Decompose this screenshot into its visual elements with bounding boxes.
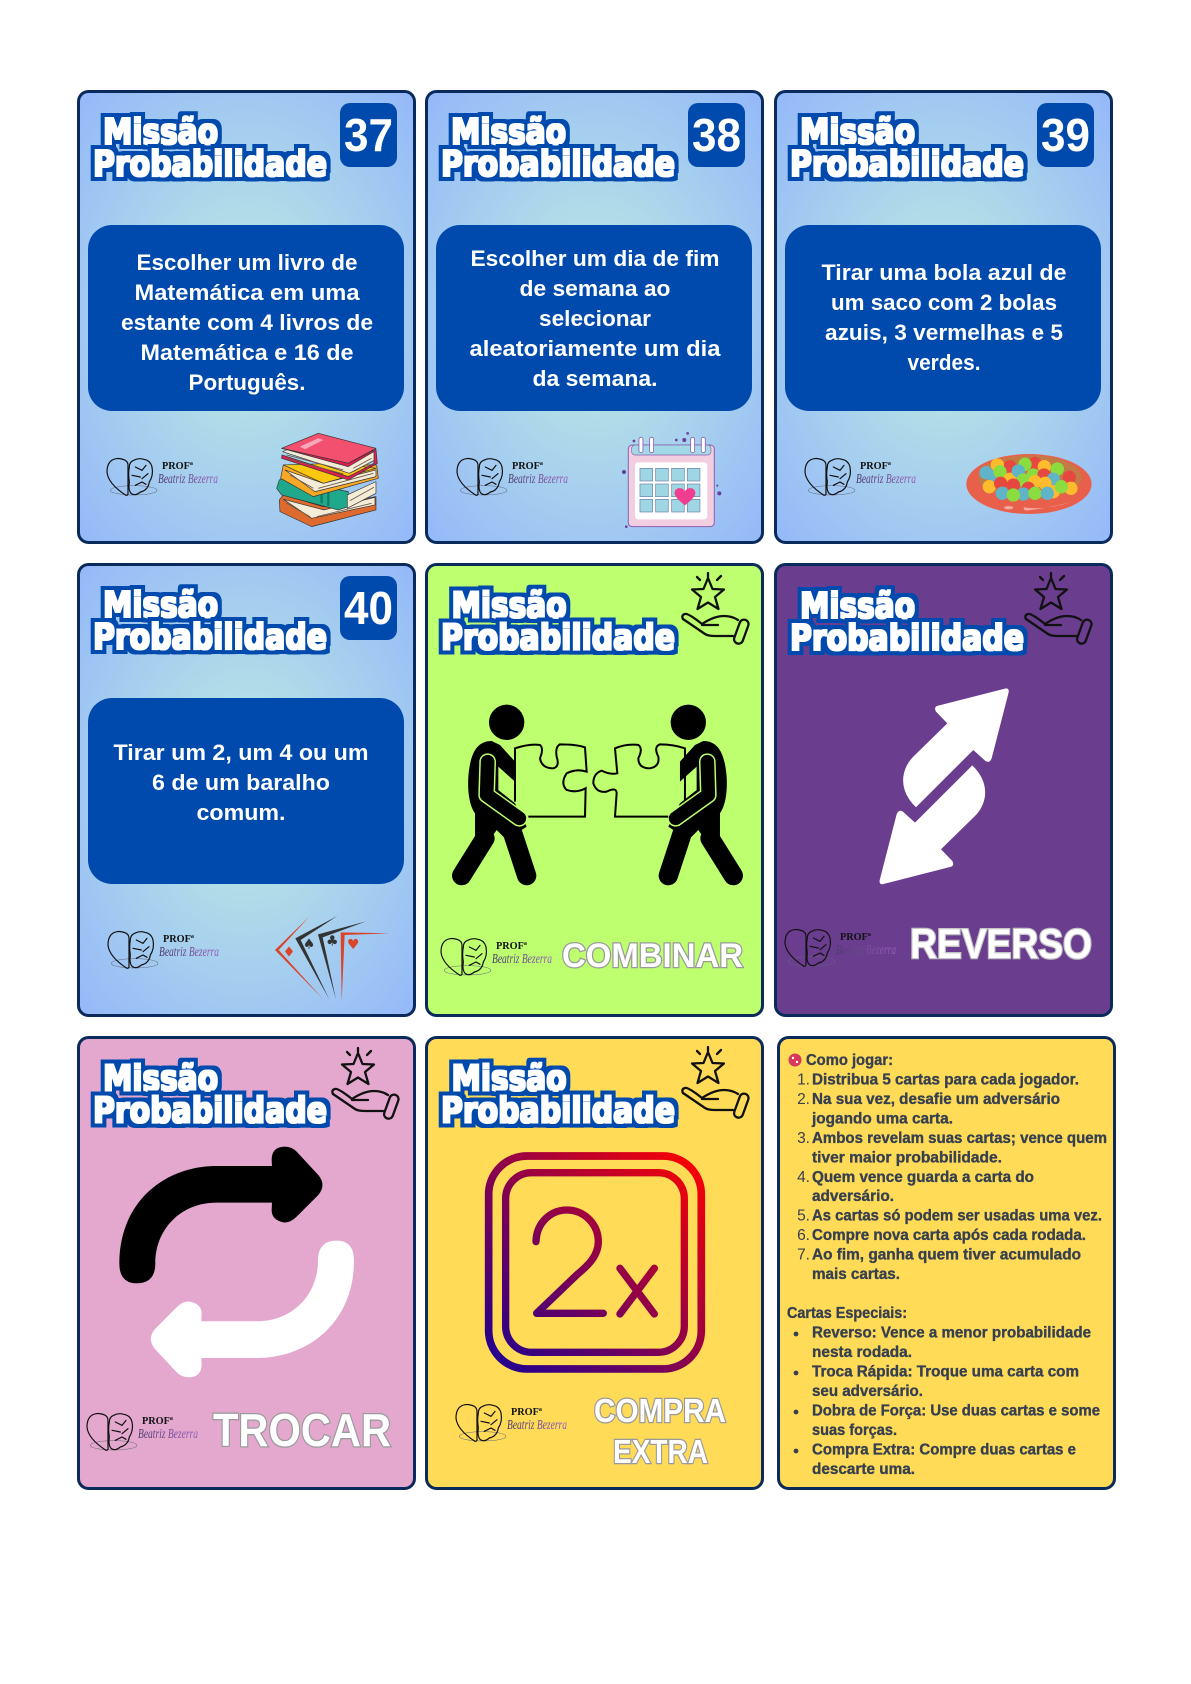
special cards text: Cartas Especiais: [787, 1305, 907, 1322]
label: COMBINAR [562, 937, 743, 975]
card reverso [776, 564, 1112, 1016]
how to play text: As cartas só podem ser usadas uma vez. [812, 1208, 1102, 1224]
question box: Matemática e 16 de [140, 340, 354, 365]
game title [790, 112, 1024, 185]
question box [88, 698, 404, 884]
question box: comum. [196, 800, 286, 825]
icon: stack of books [277, 433, 378, 527]
question box: azuis, 3 vermelhas e 5 [825, 320, 1063, 345]
question box: Escolher um livro de [136, 250, 358, 275]
special cards text: seu adversário. [812, 1383, 923, 1400]
game title: Missão [103, 112, 218, 153]
question box: Escolher um dia de fim [470, 246, 720, 271]
icon: hand with star [332, 1048, 400, 1120]
logo: Beatriz Bezerra [492, 952, 552, 967]
how to play text: 2. [797, 1091, 810, 1108]
question box: estante com 4 livros de [121, 310, 373, 335]
special cards text: Troca Rápida: Troque uma carta com [812, 1364, 1079, 1380]
icon: two people joining puzzle pieces [462, 705, 733, 876]
how to play text: Quem vence guarda a carta do [812, 1169, 1034, 1186]
question box: 6 de um baralho [152, 770, 330, 795]
logo: Beatriz Bezerra [138, 1427, 198, 1442]
game title: Missão [452, 586, 566, 626]
game title: Missão [103, 1058, 218, 1100]
card combinar [426, 564, 762, 1016]
icon: playing cards: ♠ [303, 936, 315, 952]
question box [785, 225, 1101, 411]
question box: Tirar uma bola azul de [822, 260, 1066, 285]
special cards text: Reverso: Vence a menor probabilidade [812, 1324, 1091, 1342]
logo: Beatriz Bezerra [159, 945, 219, 960]
label [594, 1392, 726, 1470]
icon: playing cards: ♦ [283, 945, 295, 961]
game title [93, 1058, 327, 1132]
number badge: 37 [344, 109, 393, 161]
card 37 [78, 92, 414, 542]
game title [441, 1058, 675, 1132]
card 38 [426, 92, 762, 542]
card 40 [78, 564, 414, 1016]
logo: Beatriz Bezerra [507, 1418, 567, 1433]
game title: Probabilidade [441, 144, 675, 185]
how to play text: Ambos revelam suas cartas; vence quem [812, 1130, 1107, 1147]
logo: Beatriz Bezerra [836, 943, 896, 958]
question box: selecionar [539, 306, 651, 331]
game title: Probabilidade [790, 144, 1024, 185]
how to play text: 4. [797, 1169, 810, 1186]
how to play text [797, 1052, 1107, 1283]
how to play text: Compre nova carta após cada rodada. [812, 1227, 1086, 1244]
question box: de semana ao [520, 276, 670, 301]
game title: Missão [103, 585, 218, 626]
how to play text: Na sua vez, desafie um adversário [812, 1091, 1060, 1108]
how to play text: 1. [797, 1072, 810, 1088]
number badge: 40 [344, 582, 393, 634]
logo [108, 932, 219, 968]
special cards text: Dobra de Força: Use duas cartas e some [812, 1402, 1100, 1420]
icon: 2x [489, 1156, 701, 1369]
game title: Missão [452, 1058, 566, 1100]
label: EXTRA [613, 1433, 708, 1470]
icon: bowl of balls [966, 454, 1092, 514]
how to play text: 6. [797, 1227, 810, 1244]
game title: Probabilidade [93, 1090, 327, 1132]
icon: hand with star [682, 1047, 750, 1119]
special cards text: Compra Extra: Compre duas cartas e [812, 1442, 1076, 1458]
label: COMPRA [594, 1392, 726, 1429]
game title: Probabilidade [441, 618, 675, 658]
game title: Missão [451, 112, 566, 153]
icon: playing cards: ♥ [347, 937, 360, 953]
logo: PROFª [496, 941, 528, 952]
card rules [778, 1038, 1114, 1488]
game title: Probabilidade [93, 617, 327, 658]
label: REVERSO [910, 920, 1092, 967]
card trocar [78, 1038, 414, 1488]
card compra extra [426, 1038, 762, 1488]
special cards text: descarte uma. [812, 1461, 915, 1478]
icon: die [788, 1054, 802, 1066]
icon: playing cards: ♣ [326, 934, 339, 950]
logo: PROFª [162, 461, 194, 472]
logo: PROFª [860, 461, 892, 472]
game title [441, 112, 675, 185]
game title [790, 586, 1024, 659]
logo: PROFª [511, 1407, 543, 1418]
icon: reverse arrows [880, 688, 1009, 884]
number badge: 39 [1041, 109, 1090, 161]
how to play text: jogando uma carta. [811, 1110, 953, 1128]
logo [87, 1414, 198, 1450]
logo: PROFª [142, 1416, 174, 1427]
logo [785, 930, 896, 966]
game title [441, 586, 675, 658]
number badge: 38 [692, 109, 741, 161]
question box [436, 225, 752, 411]
question box: Português. [188, 370, 306, 395]
game title: Probabilidade [790, 618, 1024, 659]
icon: hand with star [682, 573, 750, 645]
how to play text: 7. [797, 1246, 810, 1264]
special cards text [787, 1305, 1100, 1478]
how to play text: 3. [797, 1130, 810, 1147]
question box: da semana. [532, 366, 658, 391]
icon: calendar with heart [622, 432, 721, 528]
logo: PROFª [840, 932, 872, 943]
how to play text: Distribua 5 cartas para cada jogador. [812, 1072, 1079, 1088]
logo [457, 459, 568, 495]
logo: Beatriz Bezerra [158, 472, 218, 487]
logo: Beatriz Bezerra [508, 472, 568, 487]
label: TROCAR [213, 1404, 391, 1456]
game title: Probabilidade [441, 1090, 675, 1132]
icon: hand with star [1025, 573, 1093, 645]
game title: Missão [800, 112, 915, 153]
icon: swap arrows [119, 1147, 354, 1377]
icon: playing cards [275, 916, 390, 1002]
how to play text: tiver maior probabilidade. [812, 1150, 1002, 1166]
how to play text: 5. [797, 1208, 810, 1224]
logo [107, 459, 218, 495]
game title [93, 585, 327, 658]
how to play text: Ao fim, ganha quem tiver acumulado [812, 1246, 1081, 1264]
special cards text: suas forças. [812, 1422, 897, 1439]
game title: Probabilidade [93, 144, 327, 185]
question box [88, 225, 404, 411]
question box: Matemática em uma [134, 280, 360, 305]
question box: Tirar um 2, um 4 ou um [114, 740, 368, 765]
question box: um saco com 2 bolas [831, 290, 1057, 315]
logo [456, 1405, 567, 1441]
game title: Missão [800, 586, 915, 627]
card 39 [776, 92, 1112, 542]
logo: PROFª [512, 461, 544, 472]
how to play text: Como jogar: [806, 1052, 893, 1069]
special cards text: nesta rodada. [812, 1344, 912, 1361]
game title [93, 112, 327, 185]
logo [441, 939, 552, 975]
how to play text: adversário. [812, 1188, 894, 1205]
how to play text: mais cartas. [812, 1266, 900, 1283]
question box: aleatoriamente um dia [470, 336, 721, 361]
question box: verdes. [908, 350, 980, 375]
logo: PROFª [163, 934, 195, 945]
logo: Beatriz Bezerra [856, 472, 916, 487]
logo [805, 459, 916, 495]
